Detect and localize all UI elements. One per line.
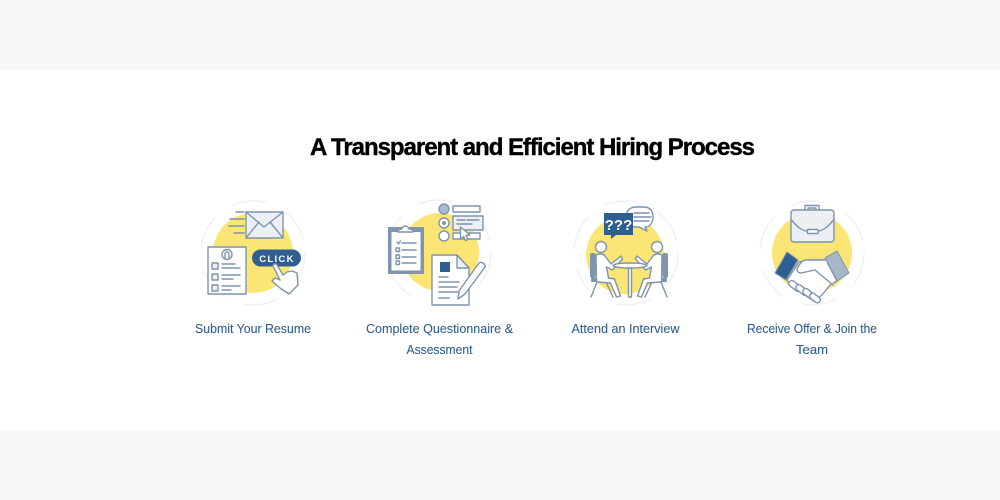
step 2: questionnaire and assessment [366, 200, 513, 357]
speech bubble: question marks: ??? [605, 217, 632, 234]
briefcase [791, 206, 834, 242]
title: A Transparent and Efficient Hiring Process [310, 134, 755, 161]
table [613, 263, 647, 297]
right cuff [825, 251, 849, 281]
step 3: attend an interview [572, 201, 680, 336]
speech bubble: lines [626, 207, 653, 231]
hand cursor [272, 264, 298, 294]
label: complete questionnaire and assessment: Complete Questionnaire & [366, 321, 513, 336]
label: attend an interview: Attend an Interview [572, 321, 680, 336]
icon: questionnaire [387, 200, 491, 305]
label: complete questionnaire and assessment [366, 321, 513, 357]
step 1: submit your resume [195, 201, 311, 336]
envelope [229, 212, 283, 238]
chair right [643, 253, 668, 297]
options form [439, 204, 483, 241]
label: receive offer and join the team: Team [796, 342, 828, 357]
chair left [590, 253, 615, 297]
document [432, 255, 469, 305]
click button: CLICK [259, 254, 295, 265]
left cuff [775, 252, 798, 280]
clasped hands [787, 260, 837, 304]
icon: handshake and briefcase [760, 201, 864, 305]
person left [596, 242, 622, 297]
label: complete questionnaire and assessment: Assessment [406, 342, 473, 357]
person right [636, 242, 662, 297]
label: receive offer and join the team [747, 321, 877, 357]
resume sheet [208, 247, 246, 294]
bottom band [0, 431, 1000, 500]
top band [0, 0, 1000, 70]
label: receive offer and join the team: Receive Offer & Join the [747, 321, 877, 336]
pencil [458, 262, 485, 299]
clipboard [388, 226, 424, 274]
step 4: receive offer and join the team [747, 201, 877, 357]
label: submit your resume: Submit Your Resume [195, 321, 311, 336]
